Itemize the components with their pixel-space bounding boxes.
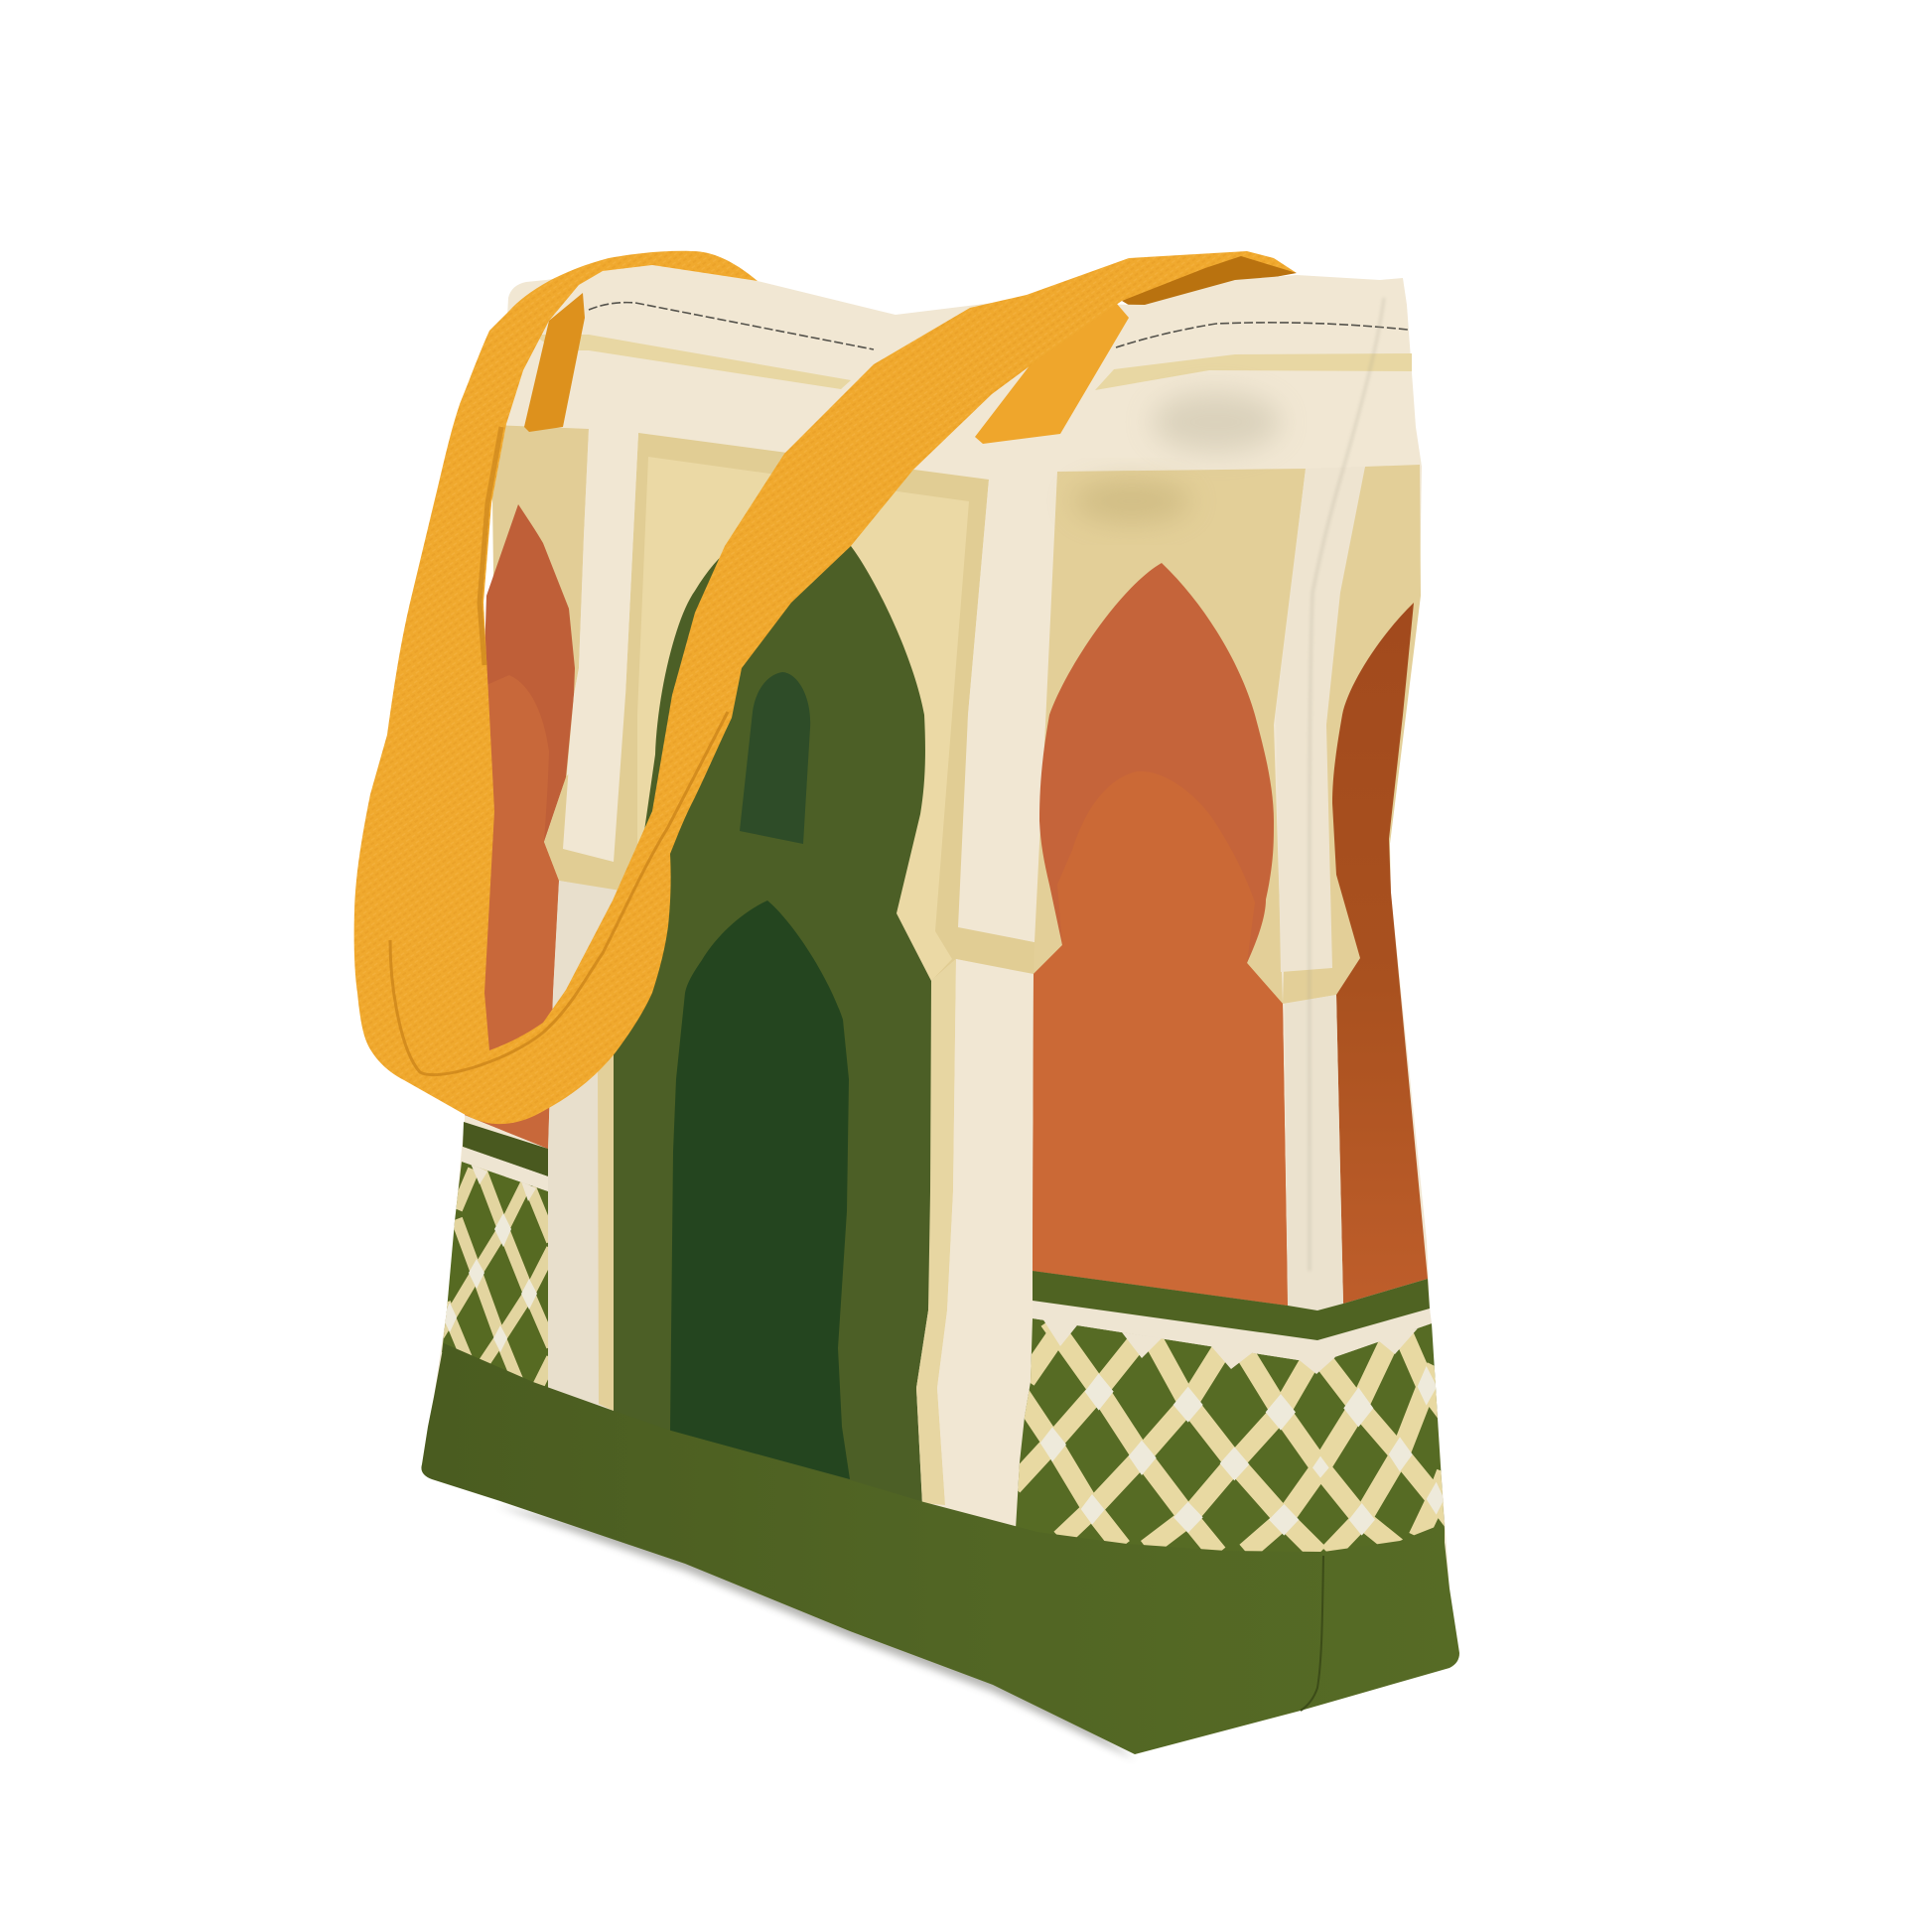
left strap tab: [524, 293, 585, 432]
bag body: [421, 265, 1459, 1754]
centre wall panel outer: [544, 433, 1062, 981]
fabric fold shading: [1072, 298, 1384, 1271]
left cream rail: [462, 1147, 548, 1191]
stitching line: [589, 303, 1408, 349]
right lattice: [1016, 1318, 1445, 1552]
left green band: [463, 1122, 548, 1176]
dark upper window: [740, 672, 810, 844]
centre upper column: [958, 472, 1057, 942]
base fold: [1301, 1556, 1323, 1711]
right upper column: [1276, 467, 1365, 972]
dark lower door: [670, 900, 850, 1479]
left lattice: [442, 1162, 548, 1388]
left wall panel: [491, 425, 589, 794]
left lower column: [533, 881, 621, 1411]
left upper column: [563, 429, 638, 862]
right dark orange arch: [1332, 603, 1428, 1304]
right green band and cream rail: [1033, 1271, 1432, 1374]
right strap tab: [975, 304, 1129, 444]
centre wall panel inner: [637, 457, 969, 981]
right wall panels: [1034, 465, 1421, 1004]
back strap underside: [1122, 253, 1297, 310]
illustration: tote bag: [353, 250, 1459, 1758]
right lower column: [1285, 995, 1343, 1311]
centre lower column: [916, 959, 1037, 1533]
yellow strap: [354, 251, 1297, 1124]
left orange arch: [465, 504, 575, 1149]
ground shadow: [496, 1505, 1135, 1759]
centre orange arch: [1033, 563, 1288, 1306]
green base band: [421, 1343, 1459, 1754]
top border stripe: [533, 335, 1412, 390]
green arch doorway: [614, 506, 931, 1505]
